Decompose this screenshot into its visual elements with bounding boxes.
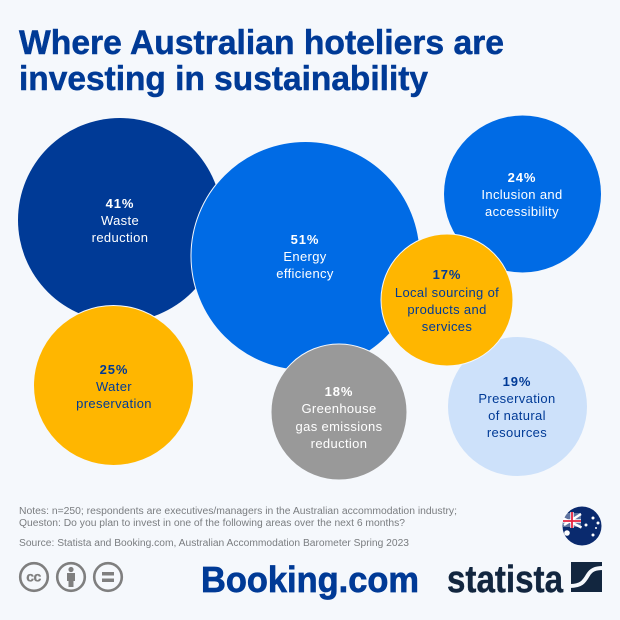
bubble: inclusion and accessibility 24% [444, 116, 601, 272]
bubble: waste reduction 41% [18, 118, 222, 322]
bubble: energy efficiency 51%: efficiency [276, 266, 334, 281]
title: Where Australian hoteliers are [19, 24, 504, 62]
icon: creative commons: cc [26, 568, 41, 584]
bubble: local sourcing 17%: Local sourcing of [395, 285, 499, 300]
bubble: waste reduction 41%: reduction [92, 230, 148, 245]
bubble: greenhouse gas emissions reduction 18%: gas emissions [296, 419, 383, 434]
bubble: waste reduction 41%: Waste [101, 213, 139, 228]
bubble: greenhouse gas emissions reduction 18%: Greenhouse [301, 401, 377, 416]
icon: no derivatives [94, 563, 122, 591]
icon: creative commons [20, 563, 48, 591]
title [19, 24, 504, 98]
bubble: preservation of natural resources 19%: of natural [488, 408, 546, 423]
notes: Notes: n=250; respondents are executives/managers in the Australian accommodation industry; [19, 506, 457, 517]
notes [19, 506, 457, 529]
source: Source: Statista and Booking.com, Australian Accommodation Barometer Spring 2023 [19, 538, 409, 549]
icon: Australian flag [562, 506, 602, 546]
logo: statista: statista [447, 559, 564, 601]
icon: statista mark [570, 562, 603, 592]
bubble: water preservation 25% [34, 306, 194, 466]
title: investing in sustainability [19, 60, 428, 98]
bubble: preservation of natural resources 19% [448, 337, 587, 476]
bubble: greenhouse gas emissions reduction 18%: reduction [311, 436, 367, 451]
bubble: preservation of natural resources 19%: 19% [503, 374, 531, 389]
bubble: energy efficiency 51% [191, 142, 420, 370]
bubble: inclusion and accessibility 24%: 24% [508, 170, 536, 185]
bubble: energy efficiency 51%: 51% [291, 232, 319, 247]
bubble: local sourcing 17%: products and [407, 302, 487, 317]
bubble: local sourcing 17%: services [422, 319, 472, 334]
bubble: water preservation 25%: preservation [76, 396, 152, 411]
bubble: energy efficiency 51%: Energy [283, 249, 327, 264]
bubble: water preservation 25%: 25% [100, 362, 128, 377]
bubble: greenhouse gas emissions reduction 18%: 18% [325, 384, 353, 399]
icon: attribution [57, 563, 85, 591]
bubble: greenhouse gas emissions reduction 18% [271, 344, 407, 480]
bubble: local sourcing 17% [381, 234, 513, 366]
notes: Queston: Do you plan to invest in one of the following areas over the next 6 months? [19, 518, 405, 529]
bubble: water preservation 25%: Water [96, 379, 132, 394]
bubble: preservation of natural resources 19%: Preservation [478, 391, 556, 406]
bubble: waste reduction 41%: 41% [106, 196, 134, 211]
bubble: inclusion and accessibility 24%: accessibility [485, 204, 559, 219]
bubble: local sourcing 17%: 17% [433, 267, 461, 282]
bubble: inclusion and accessibility 24%: Inclusion and [481, 187, 563, 202]
bubble: preservation of natural resources 19%: resources [487, 425, 547, 440]
logo: Booking.com: Booking.com [201, 559, 419, 600]
